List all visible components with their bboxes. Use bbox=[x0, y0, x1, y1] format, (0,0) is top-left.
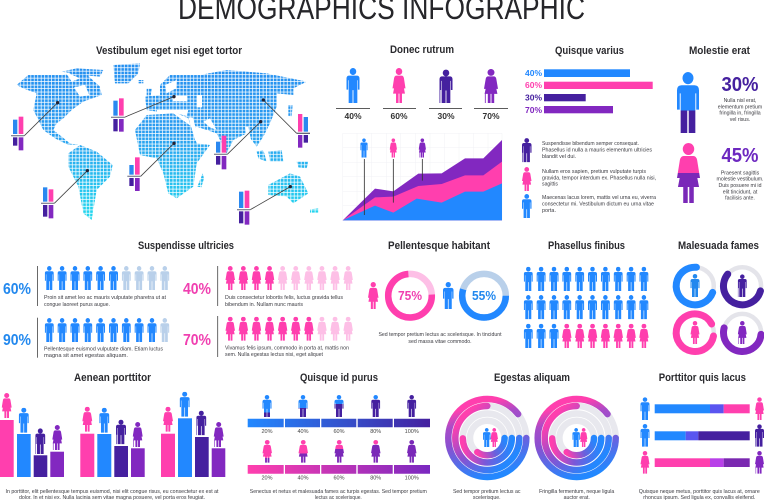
stat block: 90% bbox=[3, 318, 169, 359]
text: quisque id note bbox=[250, 489, 427, 500]
heading: quisque varius: Quisque varius bbox=[555, 45, 624, 57]
pictogram grid bbox=[524, 267, 649, 348]
text: 30% note: fringilla in, fringilla bbox=[719, 111, 761, 117]
callout: australia bbox=[237, 185, 292, 225]
panel: quisque id purus bbox=[248, 372, 430, 500]
panel: porttitor quis lacus bbox=[639, 372, 764, 500]
icon list: gravida, tempor interdum ex. Phasellus nulla nisi, bbox=[542, 175, 656, 181]
text: aenean note: In porttitor, elit pellentesque tempus euismod, nisi elit congue risus, eu consectetur ex est at bbox=[6, 489, 219, 495]
map callouts bbox=[11, 95, 310, 225]
heading: molestie erat: Molestie erat bbox=[689, 45, 750, 57]
row: women progress: 60% bbox=[333, 476, 345, 482]
callout: europe bbox=[111, 95, 176, 132]
donut: pink woman bbox=[673, 311, 717, 354]
row: men progress: 60% bbox=[333, 429, 345, 435]
stat block: 90%: 90% bbox=[3, 332, 31, 349]
text: 45% note: Praesent sagittis bbox=[721, 170, 760, 176]
bar group 2 bbox=[80, 407, 145, 477]
heading: donec rutrum: Donec rutrum bbox=[390, 44, 454, 56]
panel: aenean porttitor bbox=[0, 372, 225, 500]
icon list: porta. bbox=[542, 208, 556, 214]
text: 30% note: Nulla nisl erat, bbox=[724, 98, 756, 104]
text: 45% note bbox=[716, 170, 764, 202]
stat block: 40%: 40% bbox=[183, 281, 211, 298]
callout: north america bbox=[11, 101, 59, 150]
row: women progress: 80% bbox=[370, 476, 381, 482]
text: 45% note: elit tincidunt, at bbox=[723, 189, 758, 195]
heading: pellentesque habitant: Pellentesque habitant bbox=[388, 240, 490, 252]
row: men progress: 20% bbox=[261, 429, 273, 435]
donut: 75%: 75% bbox=[398, 289, 422, 303]
icon: elder man 30% bbox=[429, 70, 462, 121]
stat block: 90%: magna sit amet egestas aliquam. bbox=[44, 353, 128, 359]
icon list: Maecenas lacus lorem, mattis vel urna eu, viverra bbox=[542, 195, 656, 201]
text: quisque id note: Senectus et netus et malesuada fames ac turpis egestas. Sed tempor pretium bbox=[250, 489, 427, 495]
icon: blue man 40%: 40% bbox=[344, 111, 362, 121]
text: 30% note: vel risus. bbox=[730, 117, 750, 123]
icon list: Phasellus id nulla a mauris elementum ultricies bbox=[542, 148, 652, 154]
row: women progress: 40% bbox=[297, 476, 309, 482]
stat block: 60%: congue laoreet purus augue. bbox=[44, 302, 110, 308]
radial chart 1 bbox=[448, 399, 526, 477]
icon list: Suspendisse bibendum semper consequat. bbox=[542, 141, 639, 147]
stat block: 70%: Vivamus felis ipsum, commodo in porta at, mattis non bbox=[225, 346, 349, 352]
stat block: 40%: bibendum in. Nullam nunc mauris bbox=[225, 302, 303, 308]
text: 30% note bbox=[718, 98, 762, 123]
panel: donec rutrum bbox=[336, 44, 508, 220]
row: women progress: 20% bbox=[261, 476, 273, 482]
bar group 1 bbox=[0, 393, 64, 477]
callout: east asia bbox=[262, 98, 310, 148]
donut: dark man bbox=[719, 263, 764, 309]
text: 45% note: facilisis ante. bbox=[725, 196, 755, 202]
icon: blue man 40% bbox=[336, 68, 370, 121]
bar chart: 60% bbox=[525, 80, 542, 90]
stacked bar row 2 bbox=[640, 424, 764, 447]
panel: pellentesque habitant bbox=[368, 240, 506, 345]
stat block: 90%: Pellentesque euismod vulputate diam. Etiam luctus bbox=[44, 346, 163, 352]
text: donut note: Sed tempor pretium lectus ac scelerisque. In tincidunt bbox=[378, 332, 502, 338]
stat block: 40% bbox=[183, 266, 353, 308]
stat block: 40%: Duis consectetur lobortis felis, luctus gravida tellus bbox=[225, 295, 343, 301]
callout: south asia bbox=[214, 120, 262, 169]
callout: south america bbox=[41, 169, 89, 218]
bar chart bbox=[525, 68, 653, 115]
stat: 45%: 45% bbox=[722, 144, 758, 167]
text: donut note: sed massa vitae commodo. bbox=[408, 339, 472, 345]
icon list bbox=[522, 138, 656, 218]
icon: man two-tone bbox=[677, 72, 699, 133]
heading: phasellus finibus: Phasellus finibus bbox=[548, 240, 625, 252]
icon: woman bbox=[368, 282, 378, 309]
heading: egestas aliquam: Egestas aliquam bbox=[494, 372, 570, 384]
panel: quisque varius bbox=[522, 45, 656, 218]
icon: pink woman 60%: 60% bbox=[390, 111, 408, 121]
stacked bar row 3 bbox=[640, 451, 764, 474]
bar chart: 70% bbox=[525, 105, 542, 115]
panel: malesuada fames bbox=[671, 240, 764, 354]
donut: purple woman bbox=[722, 312, 763, 353]
icon: woman two-tone bbox=[677, 143, 700, 203]
stat block: 70%: sem. Nulla egestas lectus nisi, eget aliquet bbox=[225, 352, 324, 358]
text: 45% note: molestie vestibulum. bbox=[716, 177, 764, 183]
text: donut note bbox=[378, 332, 502, 345]
stat block: 60%: Proin sit amet leo ac mauris vulputate pharetra ut at bbox=[44, 295, 167, 301]
row: men progress: 80% bbox=[370, 429, 381, 435]
row: men progress bbox=[248, 395, 430, 435]
heading: quisque id purus: Quisque id purus bbox=[300, 372, 378, 384]
stat block: 60% bbox=[3, 266, 169, 308]
text: egestas note 1: Sed tempor pretium lectus ac bbox=[453, 489, 521, 495]
icon list: consectetur mi. Vestibulum dictum eu urna vitae bbox=[542, 202, 654, 208]
icon: pink woman 60% bbox=[383, 68, 416, 121]
text: 45% note: Duis posuere mi id bbox=[719, 183, 762, 189]
icon list: sagittis bbox=[542, 182, 558, 188]
panel: suspendisse ultricies bbox=[3, 240, 353, 359]
stat block: 70%: 70% bbox=[183, 332, 211, 349]
stat: 30%: 30% bbox=[722, 73, 758, 96]
stat block: 70% bbox=[183, 316, 353, 358]
bar chart: 30% bbox=[525, 92, 542, 102]
text: porttitor note bbox=[639, 489, 760, 500]
dotted world map bbox=[17, 63, 318, 220]
radial chart 2 bbox=[538, 399, 616, 477]
panel: egestas aliquam bbox=[448, 372, 616, 500]
row: women progress bbox=[248, 440, 430, 482]
panel: phasellus finibus bbox=[524, 240, 649, 348]
heading: aenean porttitor: Aenean porttitor bbox=[74, 372, 152, 384]
icon: elder woman 70%: 70% bbox=[482, 111, 500, 121]
stacked bar row 1 bbox=[640, 397, 764, 420]
text: egestas note 1 bbox=[453, 489, 521, 500]
heading: suspendisse ultricies: Suspendisse ultricies bbox=[138, 240, 234, 252]
text: 30% note: elementum pretium bbox=[718, 104, 762, 110]
text: porttitor note: Quisque neque metus, porttitor quis lacus at, ornare bbox=[639, 489, 760, 495]
text: egestas note 2: Fringilla fermentum, neque ligula bbox=[539, 489, 614, 495]
text: aenean note bbox=[6, 489, 219, 500]
icon: man bbox=[443, 282, 454, 309]
text: egestas note 2 bbox=[539, 489, 614, 500]
bar group 3 bbox=[161, 392, 225, 477]
icon list: Nullam eros sapien, pretium vulputate turpis bbox=[542, 169, 646, 175]
panel: world map bbox=[11, 46, 318, 225]
donut: blue man bbox=[671, 262, 719, 310]
icon list: blandit vel dui. bbox=[542, 154, 576, 160]
stat block: 60%: 60% bbox=[3, 281, 31, 298]
bar chart: 40% bbox=[525, 68, 542, 78]
row: women progress: 100% bbox=[405, 476, 419, 482]
heading: porttitor quis lacus: Porttitor quis lacus bbox=[659, 372, 746, 384]
heading: world map: Vestibulum eget nisi eget tortor bbox=[96, 45, 243, 57]
icon: elder man 30%: 30% bbox=[437, 111, 455, 121]
row: men progress: 100% bbox=[405, 429, 419, 435]
icon: elder woman 70% bbox=[474, 69, 508, 121]
donut: 55%: 55% bbox=[472, 289, 496, 303]
panel: molestie erat bbox=[677, 45, 764, 203]
area chart bbox=[343, 133, 502, 220]
row: men progress: 40% bbox=[297, 429, 309, 435]
callout: africa bbox=[127, 142, 176, 191]
